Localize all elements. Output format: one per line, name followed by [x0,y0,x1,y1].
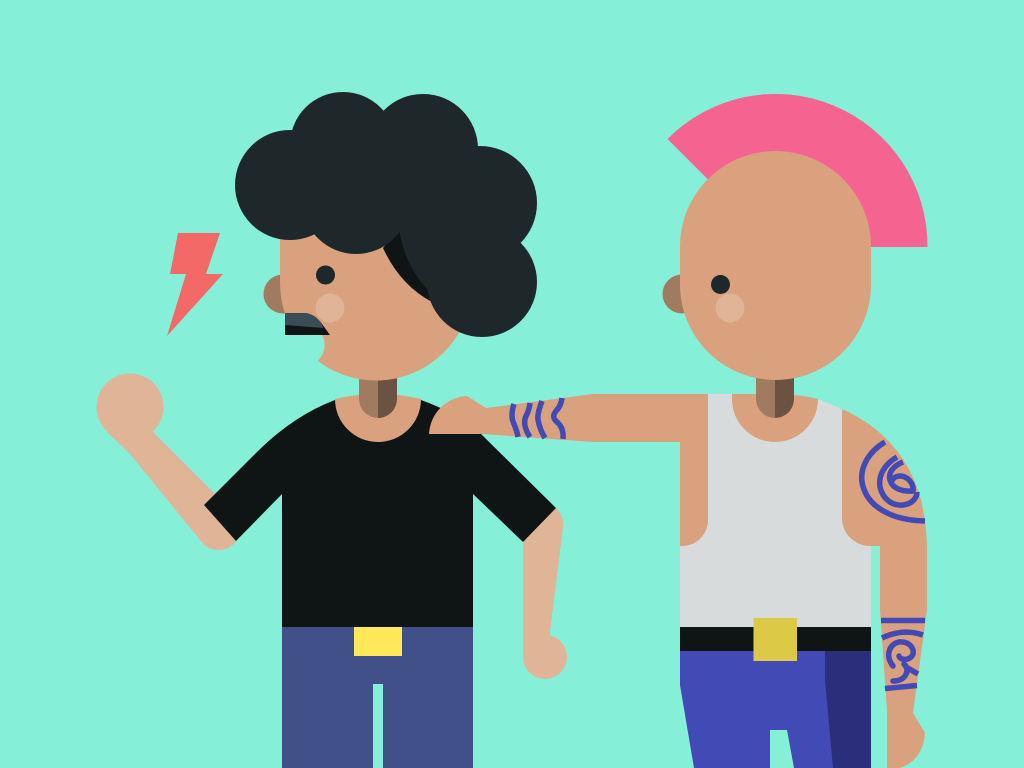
eye [711,275,730,294]
wrist tattoo [881,620,925,688]
ear [662,274,702,314]
arm reaching across shoulder [429,394,708,546]
neck [359,370,397,418]
left arm and fist [96,374,237,550]
mustache [285,313,330,335]
trousers [680,651,871,768]
trouser shadow [825,651,871,768]
neckline [732,394,818,442]
right arm and fist [523,508,567,679]
face [280,220,472,381]
cheek [316,294,344,322]
black belt [680,627,871,651]
right arm with shoulder [842,409,927,768]
ear [264,274,302,314]
forearm wave tattoo [512,398,563,439]
belt buckle [354,627,402,656]
pink mohawk [668,94,928,247]
character: curly-haired man [96,92,567,768]
black t-shirt [204,400,556,627]
shoulder spiral tattoo [862,442,925,521]
belt buckle [754,618,797,661]
neck [756,370,794,418]
curly hair [235,92,537,337]
hair shadow [383,215,450,302]
eye [316,266,335,284]
white tank top [680,394,871,627]
cheek [716,294,744,322]
head [680,151,871,380]
jeans [282,627,473,768]
character: punk with mohawk [429,94,928,768]
icon: lightning bolt [167,233,223,336]
neckline [335,394,421,442]
